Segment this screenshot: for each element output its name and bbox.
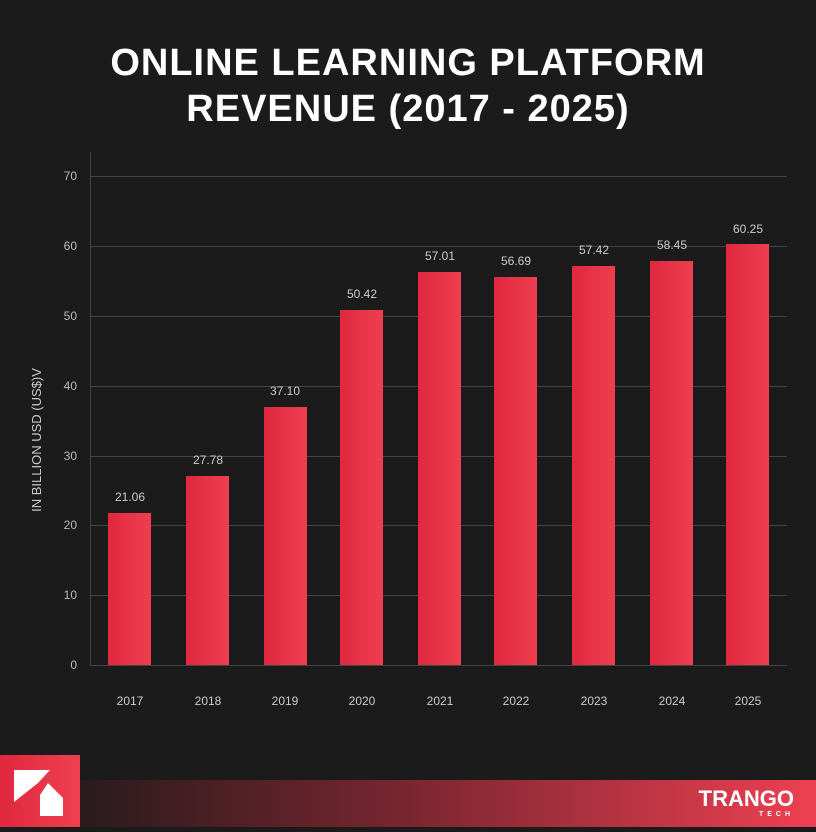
value labels: 60.25	[733, 222, 763, 236]
brand logo text: TRANGO	[699, 786, 794, 811]
brand logo text: TECH	[759, 811, 794, 818]
value labels: 27.78	[193, 453, 223, 467]
value labels: 37.10	[270, 384, 300, 398]
value labels: 56.69	[501, 254, 531, 268]
y axis ticks	[64, 169, 77, 672]
bars	[108, 244, 769, 665]
y axis ticks: 0	[70, 658, 77, 672]
y axis ticks: 70	[64, 169, 77, 183]
icon: logo square	[0, 755, 80, 827]
value labels: 57.01	[425, 249, 455, 263]
value labels: 57.42	[579, 243, 609, 257]
y axis ticks: 50	[64, 309, 77, 323]
x labels: 2020	[349, 694, 376, 708]
y axis label: IN BILLION USD (US$)V	[29, 368, 44, 512]
y axis ticks: 40	[64, 379, 77, 393]
x labels: 2021	[427, 694, 454, 708]
x labels: 2023	[581, 694, 608, 708]
y axis ticks: 30	[64, 449, 77, 463]
x labels: 2018	[195, 694, 222, 708]
title: ONLINE LEARNING PLATFORM	[110, 42, 706, 84]
x labels: 2019	[272, 694, 299, 708]
x labels: 2025	[735, 694, 762, 708]
y axis ticks: 20	[64, 518, 77, 532]
y axis ticks: 10	[64, 588, 77, 602]
value labels: 21.06	[115, 490, 145, 504]
y axis ticks: 60	[64, 239, 77, 253]
title	[110, 42, 706, 130]
footer band	[80, 780, 816, 827]
title: REVENUE (2017 - 2025)	[186, 88, 630, 130]
x labels	[117, 694, 762, 708]
x labels: 2017	[117, 694, 144, 708]
value labels	[115, 222, 763, 504]
value labels: 58.45	[657, 238, 687, 252]
x labels: 2022	[503, 694, 530, 708]
value labels: 50.42	[347, 287, 377, 301]
x labels: 2024	[659, 694, 686, 708]
